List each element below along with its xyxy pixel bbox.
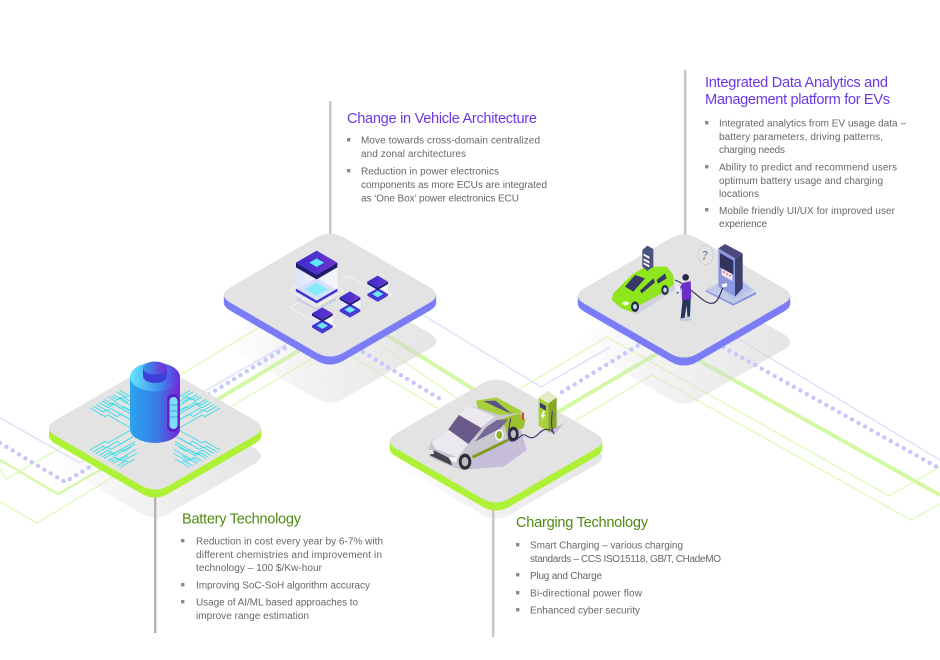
- bullet list: charging needs: [719, 145, 785, 156]
- bullet list: [705, 118, 906, 230]
- platform: battery: [49, 366, 261, 498]
- bullet list: Usage of AI/ML based approaches to: [196, 598, 358, 608]
- bullet list: [347, 136, 547, 204]
- bullet list: standards – CCS ISO15118, GB/T, CHadeMO: [530, 554, 721, 565]
- bullet list: components as more ECUs are integrated: [361, 180, 547, 191]
- heading: Integrated Data Analytics and: [705, 75, 888, 91]
- heading: Change in Vehicle Architecture: [347, 111, 537, 127]
- bullet list: technology – 100 $/Kw-hour: [196, 563, 323, 574]
- bullet list: Bi-directional power flow: [530, 588, 643, 600]
- heading: Battery Technology: [182, 512, 302, 528]
- bullet list: as ‘One Box’ power electronics ECU: [361, 194, 519, 204]
- panel: integrated data analytics: Management platform for EVs: [705, 92, 890, 108]
- bullet list: different chemistries and improvement in: [196, 550, 382, 561]
- icon: electric car charging at station: [428, 391, 564, 470]
- bullet list: Reduction in cost every year by 6-7% with: [196, 536, 383, 548]
- bullet list: locations: [719, 189, 759, 200]
- platform: vehicle architecture: [224, 233, 436, 365]
- background connector lines: [0, 303, 940, 523]
- icon: battery with circuit traces: [90, 362, 220, 468]
- bullet list: [516, 540, 721, 616]
- shadow plate: battery: [49, 394, 261, 518]
- bullet list: [181, 536, 383, 622]
- panel: charging technology: [516, 515, 721, 616]
- bullet list: Enhanced cyber security: [530, 606, 640, 616]
- bullet list: optimum battery usage and charging: [719, 176, 883, 187]
- platform: data analytics: [578, 234, 790, 366]
- icon: car, user and smart charging kiosk: [612, 244, 756, 321]
- bullet list: Mobile friendly UI/UX for improved user: [719, 206, 896, 217]
- shadow plate: data analytics: [578, 280, 790, 404]
- platform: charging: [390, 379, 602, 511]
- bullet list: battery parameters, driving patterns,: [719, 132, 883, 143]
- bullet list: and zonal architectures: [361, 149, 466, 160]
- bullet list: Ability to predict and recommend users: [719, 162, 897, 174]
- bullet list: Integrated analytics from EV usage data –: [719, 118, 906, 130]
- shadow plate: vehicle architecture: [224, 279, 436, 403]
- heading: Charging Technology: [516, 515, 649, 531]
- bullet list: Smart Charging – various charging: [530, 540, 683, 552]
- bullet list: Move towards cross-domain centralized: [361, 136, 540, 146]
- icon: car, user and smart charging kiosk: ?: [703, 250, 708, 260]
- icon: processor chips: [289, 251, 392, 334]
- bullet list: Plug and Charge: [530, 571, 602, 582]
- bullet list: Improving SoC-SoH algorithm accuracy: [196, 580, 370, 592]
- bullet list: Reduction in power electronics: [361, 166, 499, 178]
- panel: integrated data analytics: [705, 75, 906, 230]
- panel: change in vehicle architecture: [347, 111, 547, 204]
- vertical leader lines: [154, 70, 686, 637]
- panel: battery technology: [181, 512, 383, 622]
- dotted connector lines: [0, 343, 937, 482]
- bullet list: improve range estimation: [196, 611, 309, 622]
- bullet list: experience: [719, 219, 767, 230]
- shadow plate: charging: [390, 395, 602, 519]
